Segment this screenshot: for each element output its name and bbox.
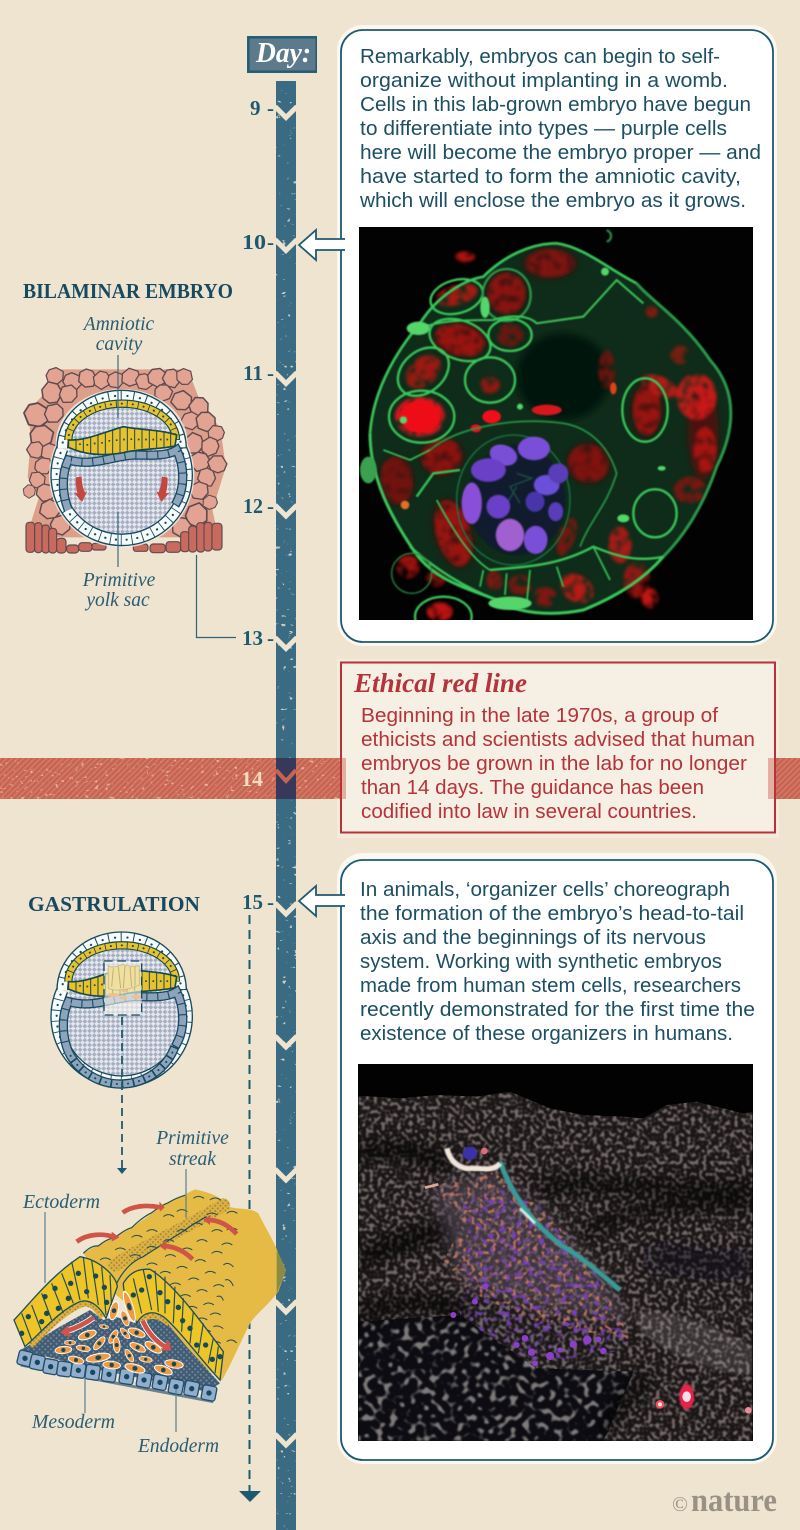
label: primitive streak: Primitive — [155, 1128, 229, 1149]
day numbers: 15 — [242, 890, 263, 914]
callout text: ethicists and scientists advised that human — [361, 728, 755, 751]
panel text: Remarkably, embryos can begin to self- — [360, 45, 720, 68]
label: endoderm — [137, 1390, 219, 1457]
panel text: have started to form the amniotic cavity, — [360, 165, 741, 188]
label: amniotic cavity — [82, 314, 155, 418]
nature logo: nature — [691, 1483, 777, 1519]
diagram: gastrulation embryo — [57, 937, 187, 1084]
panel text: In animals, ‘organizer cells’ choreograph — [360, 878, 730, 901]
day numbers: - — [267, 626, 274, 650]
callout text: embryos be grown in the lab for no longer — [361, 752, 747, 775]
label: mesoderm: Mesoderm — [31, 1412, 115, 1433]
yellow surface — [83, 1189, 286, 1381]
day numbers: 11 — [243, 361, 263, 385]
panel text: axis and the beginnings of its nervous — [360, 926, 706, 949]
callout text — [361, 704, 755, 823]
mesoderm cells — [55, 1290, 184, 1377]
diagram: bilaminar embryo — [21, 365, 229, 553]
surface scales — [83, 1195, 207, 1283]
label: amniotic cavity: Amniotic — [82, 314, 155, 335]
dashed arrow: timeline continues — [239, 915, 261, 1502]
day numbers: - — [267, 890, 274, 914]
mesoderm layer — [20, 1310, 220, 1392]
day numbers: - — [267, 494, 274, 518]
primitive streak — [115, 1205, 223, 1265]
panel text: Cells in this lab-grown embryo have begun — [360, 93, 751, 116]
arrows: growth direction — [74, 477, 169, 502]
panel: self-organizing embryo — [337, 25, 777, 646]
label: endoderm: Endoderm — [137, 1436, 219, 1457]
label: primitive streak — [155, 1128, 229, 1218]
heading: bilaminar embryo: BILAMINAR EMBRYO — [23, 279, 233, 303]
panel text: made from human stem cells, researchers — [360, 974, 741, 997]
endoderm cells — [16, 1350, 217, 1402]
day numbers: - — [267, 230, 274, 254]
dashed arrow: zoom to section — [117, 1017, 127, 1174]
panel: organizer cells — [337, 853, 777, 1464]
day numbers: 10 — [242, 230, 266, 254]
micrograph: lab-grown embryo — [359, 227, 753, 637]
label: primitive yolk sac: Primitive — [82, 570, 156, 591]
nature logo: © — [672, 1492, 688, 1516]
label: primitive streak: streak — [169, 1149, 216, 1170]
day numbers: 12 — [243, 494, 263, 518]
label: ectoderm: Ectoderm — [22, 1192, 100, 1213]
panel text: organize without implanting in a womb. — [360, 69, 728, 92]
day numbers: 14 — [241, 767, 264, 791]
panel text: which will enclose the embryo as it grows. — [359, 189, 746, 212]
panel text: existence of these organizers in humans. — [360, 1022, 733, 1045]
day numbers: 9 — [250, 96, 260, 120]
panel text: to differentiate into types — purple cells — [360, 117, 727, 140]
callout text: codified into law in several countries. — [361, 800, 697, 823]
panel text — [360, 878, 755, 1045]
label: primitive yolk sac — [82, 512, 156, 611]
day numbers: 13 — [242, 626, 263, 650]
day heading — [247, 36, 317, 73]
panel text: here will become the embryo proper — and — [360, 141, 761, 164]
label: ectoderm — [22, 1192, 100, 1283]
day numbers: - — [267, 361, 274, 385]
label: primitive yolk sac: yolk sac — [84, 590, 150, 611]
timeline bar — [275, 81, 297, 1530]
leader line: day 13 — [196, 555, 236, 638]
diagram: gastrulation cross-section — [14, 1189, 286, 1402]
arrow: day 15 — [299, 886, 347, 916]
day heading: Day: — [255, 38, 311, 69]
label: amniotic cavity: cavity — [96, 334, 143, 355]
panel: ethical red line — [341, 662, 775, 832]
day numbers — [241, 96, 274, 914]
highlighted box — [104, 961, 142, 1015]
callout text: than 14 days. The guidance has been — [361, 776, 704, 799]
panel text — [359, 45, 761, 212]
callout text: Beginning in the late 1970s, a group of — [361, 704, 718, 727]
panel text: system. Working with synthetic embryos — [360, 950, 722, 973]
arrows: cell migration — [60, 1202, 237, 1351]
micrograph: synthetic embryo — [358, 1064, 753, 1441]
heading: gastrulation: GASTRULATION — [28, 892, 200, 916]
callout heading: Ethical red line — [353, 668, 527, 698]
ectoderm — [14, 1257, 223, 1380]
label: mesoderm — [31, 1377, 115, 1433]
day numbers: - — [267, 96, 274, 120]
panel text: the formation of the embryo’s head-to-tail — [360, 902, 744, 925]
red band: day 14 — [0, 758, 800, 799]
arrow: day 10 — [299, 230, 347, 260]
panel text: recently demonstrated for the first time the — [360, 998, 755, 1021]
